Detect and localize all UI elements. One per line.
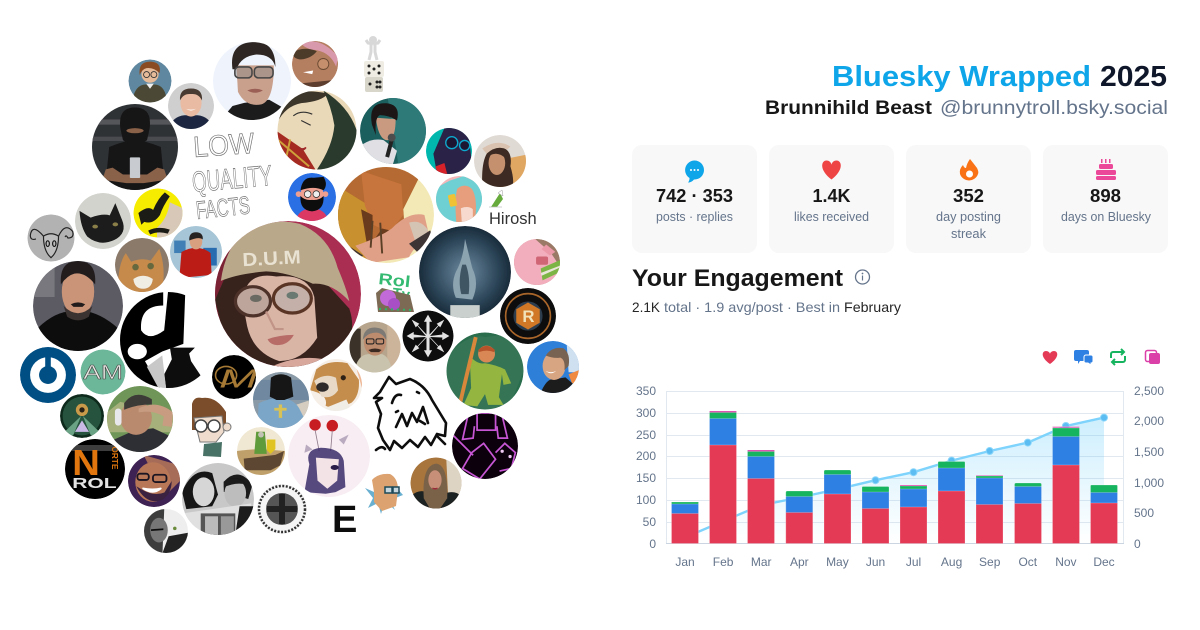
avatar: otter cartoon on teal and pink (436, 176, 482, 222)
month labels: Sep (979, 555, 1001, 569)
left axis labels (636, 384, 656, 551)
panel: day posting streak: day posting (936, 210, 1001, 224)
panel: likes received (769, 145, 894, 253)
avatar: woman with long hair dark clothes (410, 458, 462, 508)
title: Bluesky Wrapped (832, 61, 1091, 93)
avatar: man with headphones shading eyes (107, 386, 173, 452)
avatar: woman with orange background (474, 135, 526, 187)
right axis labels (1134, 384, 1164, 551)
right axis labels: 0 (1134, 537, 1141, 551)
avatar: green cyclops eye emblem (60, 394, 104, 438)
avatar: noir black and white figure (120, 292, 200, 388)
panel: posts and replies: posts · replies (656, 210, 733, 224)
icon: chat bubble (685, 160, 704, 182)
avatar: vintage couple reading black and white (182, 463, 254, 535)
avatar: goat line drawing (27, 214, 74, 262)
engagement summary: February (844, 299, 901, 315)
avatar: main profile, woman with helmet and glasses: D.U.M (242, 247, 301, 271)
avatar: golden retriever dog (310, 359, 362, 411)
avatar: smiling man on blue (527, 341, 579, 393)
left axis labels: 350 (636, 384, 656, 398)
panel: days on Bluesky: days on Bluesky (1061, 210, 1152, 224)
month labels: Jan (675, 555, 695, 569)
avatar: Rolear Esto orange R badge (500, 288, 556, 344)
text logo: Low Quality Facts handwriting: LOW (192, 128, 256, 164)
avatar: N Orte ROL logo: ROL (72, 475, 117, 492)
avatar: Vader helmet man in blue shirt (253, 372, 313, 428)
heading: your engagement: Your Engagement (632, 265, 843, 292)
month labels: Aug (941, 555, 962, 569)
avatar: N Orte ROL logo (65, 439, 125, 499)
avatar: man in red shirt (170, 226, 222, 278)
right axis labels: 2,000 (1134, 414, 1164, 428)
avatar: older man with glasses and moustache (350, 322, 403, 372)
month labels (675, 555, 1115, 569)
avatar: water sculpture on dark blue (419, 226, 511, 318)
display name and handle (765, 98, 1168, 119)
left axis labels: 250 (636, 428, 656, 442)
avatar: man with dark-rimmed glasses (213, 42, 291, 120)
panel: likes received: likes received (794, 210, 869, 224)
panel: posts and replies (632, 145, 757, 253)
avatar: N Orte ROL logo: N (72, 442, 100, 483)
logo: Rol TV green treasure chest: Rol (378, 271, 411, 291)
avatar: Rolear Esto orange R badge: R (522, 307, 535, 326)
panel: days on Bluesky: 898 (1090, 186, 1121, 206)
avatar: pink pig with book (514, 239, 560, 285)
broken image icon with alt text (489, 190, 537, 228)
icon: likes heart (1043, 351, 1057, 364)
left axis labels: 100 (636, 493, 656, 507)
avatar: cartoon man in green with staff (446, 332, 524, 410)
text logo: Low Quality Facts handwriting (191, 128, 273, 225)
avatar: cartoon boy with big glasses (192, 398, 231, 457)
month labels: Jun (866, 555, 885, 569)
right axis labels: 2,500 (1134, 384, 1164, 398)
logo: Rol TV green treasure chest: Tv (392, 285, 411, 304)
legend icons (1043, 349, 1160, 365)
engagement summary: 2.1K (632, 299, 661, 315)
left axis labels: 0 (649, 537, 656, 551)
panel: likes received: 1.4K (812, 186, 850, 206)
avatar: AM green mosaic monogram (80, 350, 126, 394)
avatar: Wolverine comic art (338, 167, 434, 263)
stacked bars (672, 411, 1118, 544)
broken image icon with alt text: Hirosh (489, 210, 537, 228)
display name and handle: Brunnihild Beast (765, 98, 933, 119)
month labels: Oct (1018, 555, 1038, 569)
avatar: yellow dragon (134, 188, 182, 238)
avatar: cartoon bearded man on blue (288, 173, 336, 221)
avatar: medieval knight on horse (237, 427, 285, 475)
avatar: cartoon person with glasses (128, 60, 172, 102)
display name and handle: @brunnytroll.bsky.social (940, 98, 1168, 119)
panel: day posting streak: 352 (953, 186, 984, 206)
avatar: man on grey background (168, 83, 214, 129)
doodle: spiky monster (374, 377, 446, 450)
engagement summary (632, 299, 901, 315)
month labels: Apr (790, 555, 809, 569)
left axis labels: 200 (636, 449, 656, 463)
avatar: actor in black shirt on grey (33, 261, 123, 351)
icon: heart (822, 160, 841, 180)
avatar cloud (20, 36, 579, 553)
title: 2025 (1100, 61, 1167, 93)
month labels: Jul (906, 555, 921, 569)
logo: Rol TV green treasure chest (376, 271, 414, 312)
right axis labels: 1,000 (1134, 476, 1164, 490)
logo: E letter: E (332, 499, 357, 541)
avatar: main profile, woman with helmet and glasses (215, 221, 361, 367)
grid (666, 391, 1124, 544)
left axis labels: 150 (636, 471, 656, 485)
avatar: cartoon with pink headscarf (292, 41, 338, 87)
avatar: girl with roses illustration (288, 415, 370, 497)
month labels: Mar (751, 555, 772, 569)
icon: replies bubbles (1074, 350, 1093, 365)
month labels: Nov (1055, 555, 1077, 569)
avatar: neon pink robot and dice (452, 413, 518, 479)
panel: day posting streak: streak (951, 227, 987, 241)
avatar: small black and white man (144, 509, 188, 553)
icon: birthday cake (1096, 159, 1116, 180)
avatar: AM green mosaic monogram: AM (83, 361, 123, 384)
avatar: N Orte ROL logo: ORTE (110, 446, 120, 470)
avatar: gold M monogram on black (212, 355, 259, 399)
panel: days on Bluesky (1043, 145, 1168, 253)
area and cumulative line (682, 414, 1108, 544)
avatar: Japanese woodblock woman (278, 90, 356, 170)
icon: info (856, 270, 870, 284)
text logo: Low Quality Facts handwriting: FACTS (195, 191, 251, 225)
avatar: mirror selfie with sunglasses (92, 104, 178, 190)
avatar: laughing bald man with glasses, purple (128, 455, 180, 507)
month labels: Feb (713, 555, 734, 569)
avatar: blue ring logo (20, 347, 76, 403)
avatar: chaos star (402, 310, 454, 362)
month labels: Dec (1093, 555, 1115, 569)
text logo: Low Quality Facts handwriting: QUALITY (191, 160, 273, 199)
avatar: black cat (75, 193, 131, 249)
month labels: May (826, 555, 849, 569)
avatar: man with microphone and teal curtain (360, 98, 426, 164)
icon: reposts arrows (1111, 349, 1125, 365)
image: white figure standing on dice (364, 36, 384, 92)
panel: posts and replies: 742 · 353 (656, 186, 733, 206)
engagement summary: total · 1.9 avg/post · Best in (664, 299, 840, 315)
left axis labels: 300 (636, 406, 656, 420)
left axis labels: 50 (643, 515, 656, 529)
icon: quotes copies (1146, 350, 1160, 364)
right axis labels: 1,500 (1134, 445, 1164, 459)
avatar: orange cat (115, 238, 169, 292)
sticker: bald cartoon head with sunglasses (365, 474, 403, 514)
avatar: Darth Vader cartoon on teal (426, 128, 472, 174)
chart: monthly engagement (636, 384, 1164, 569)
avatar: gold M monogram on black: M (219, 366, 259, 394)
panel: day posting streak (906, 145, 1031, 253)
icon: flame (960, 159, 978, 180)
avatar: ornate seal in black and white (257, 484, 307, 534)
right axis labels: 500 (1134, 506, 1154, 520)
